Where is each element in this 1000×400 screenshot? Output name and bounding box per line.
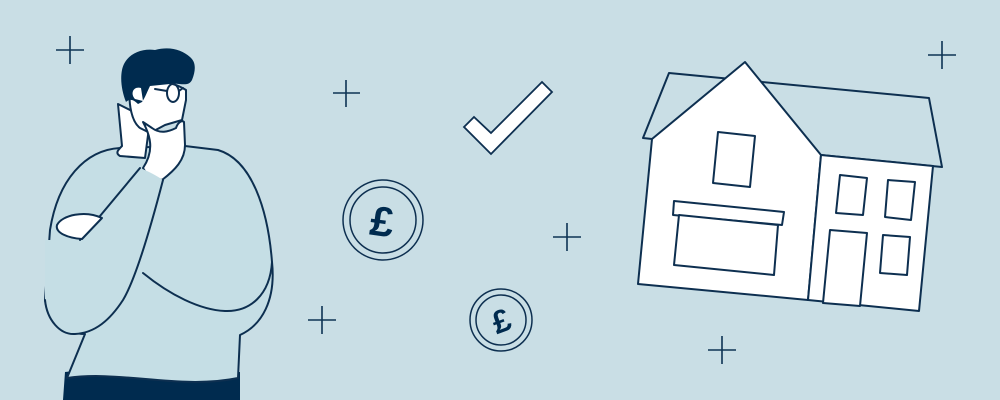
ear <box>133 88 143 101</box>
chin hand <box>143 121 185 180</box>
checkmark <box>464 82 552 154</box>
face <box>129 81 186 133</box>
side wall <box>808 155 933 311</box>
tucked hand <box>57 214 102 239</box>
upper window <box>713 132 755 187</box>
garage door <box>674 215 778 275</box>
sweater torso <box>45 146 273 382</box>
hair <box>121 48 195 104</box>
left forearm outline <box>45 168 163 334</box>
pants <box>63 370 240 400</box>
door <box>823 230 867 306</box>
coin small <box>470 289 532 351</box>
left forearm fill <box>45 168 163 334</box>
coin large <box>343 180 423 260</box>
coin small: £ <box>487 301 516 341</box>
house <box>638 62 942 311</box>
man <box>45 48 273 400</box>
windows <box>836 175 867 215</box>
neck <box>117 104 150 158</box>
right arm (near) <box>143 262 272 311</box>
roof <box>643 73 942 167</box>
gable wall <box>638 62 821 300</box>
decorative plus signs <box>56 36 956 364</box>
glasses <box>167 84 179 102</box>
garage canopy <box>673 201 784 225</box>
coin large: £ <box>367 197 397 246</box>
